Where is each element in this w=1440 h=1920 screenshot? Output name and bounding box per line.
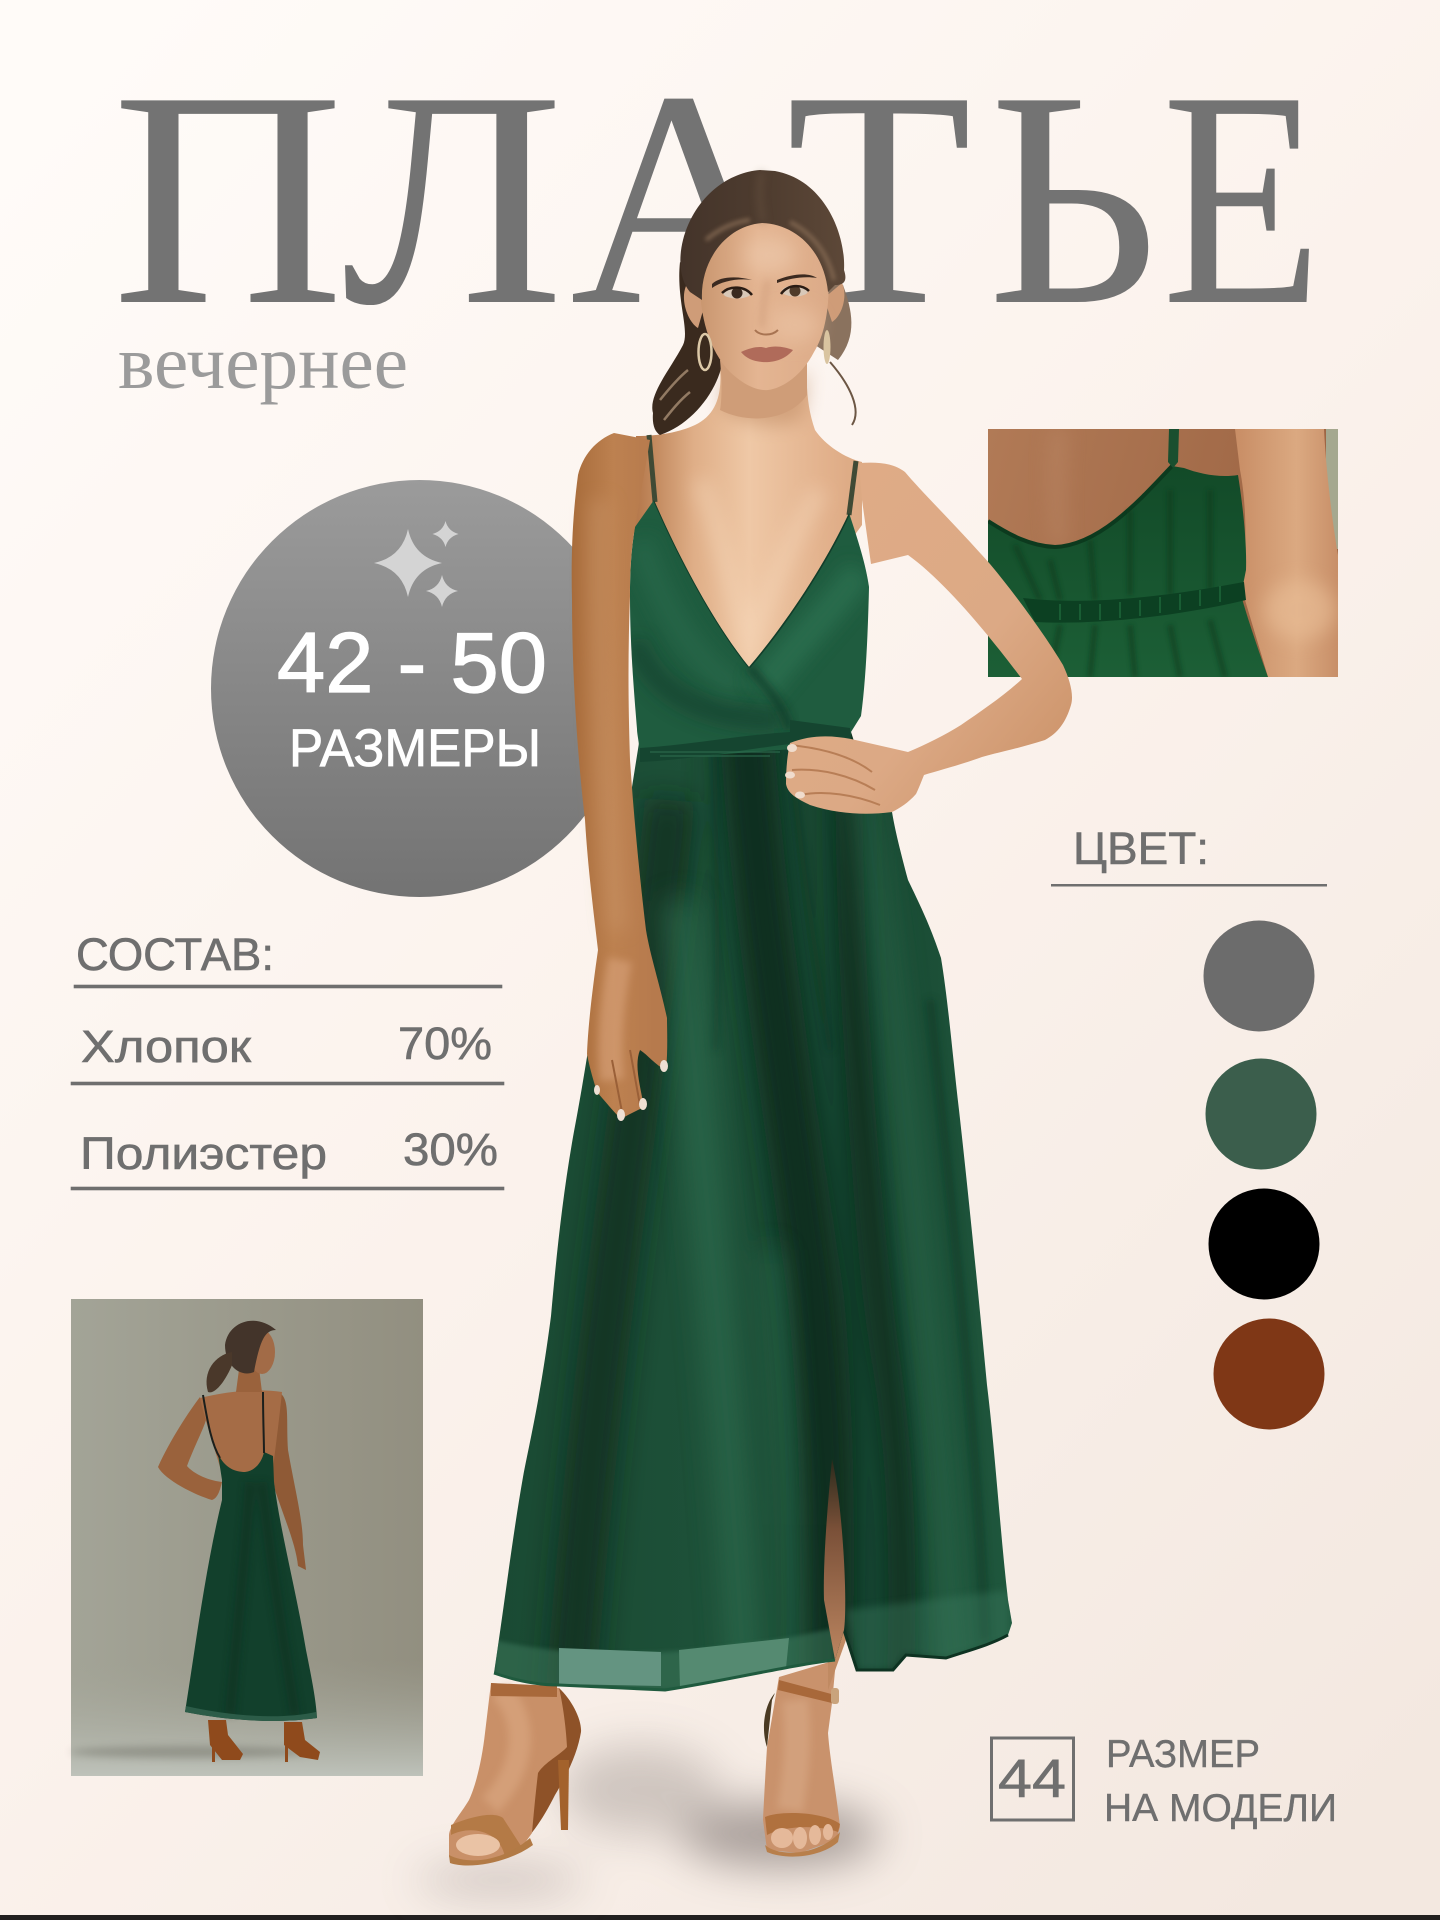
colour options: ЦВЕТ: xyxy=(1073,823,1209,874)
eyebrows xyxy=(712,274,817,288)
neck shadow xyxy=(720,355,807,418)
back view model xyxy=(158,1321,320,1762)
title: Ь xyxy=(988,28,1158,369)
skirt xyxy=(494,700,1012,1700)
icon: sparkles xyxy=(374,521,458,607)
model size: РАЗМЕР xyxy=(1106,1733,1260,1776)
title: А xyxy=(570,28,792,369)
composition table: Хлопок xyxy=(81,1021,251,1072)
right arm with hand on hip xyxy=(785,463,1072,814)
composition table xyxy=(71,929,504,1190)
model size: НА МОДЕЛИ xyxy=(1104,1787,1337,1830)
hair back and ponytail xyxy=(652,262,722,435)
subtitle: вечернее xyxy=(118,321,408,405)
eyes xyxy=(723,288,751,298)
model size xyxy=(992,1733,1337,1830)
bottom dark strip xyxy=(0,1915,1440,1920)
stray hair wisp xyxy=(830,362,856,425)
straps xyxy=(649,435,856,515)
composition table: Полиэстер xyxy=(80,1128,327,1179)
photo: back strap detail xyxy=(988,429,1338,677)
neck and chest xyxy=(630,365,862,680)
title: Т xyxy=(786,28,972,369)
waistband xyxy=(640,720,851,762)
model size: 44 xyxy=(998,1749,1066,1809)
composition table: 30% xyxy=(403,1124,498,1175)
title xyxy=(112,28,1322,369)
title: Л xyxy=(342,28,564,369)
hair xyxy=(680,170,845,300)
earrings xyxy=(698,334,712,370)
photo: back view of dress xyxy=(70,1299,423,1776)
composition table: 70% xyxy=(398,1018,492,1069)
title: П xyxy=(112,28,344,369)
size badge xyxy=(211,480,628,897)
slit xyxy=(824,1459,845,1660)
heading: composition: СОСТАВ: xyxy=(76,929,274,980)
colour options xyxy=(1051,823,1327,1430)
floor shadow xyxy=(415,1745,880,1894)
head xyxy=(680,170,845,418)
bodice xyxy=(630,500,869,762)
model in green dress xyxy=(449,170,1072,1866)
size badge: 42 - 50 xyxy=(277,616,547,711)
lips xyxy=(741,347,793,362)
left arm and hanging hand xyxy=(572,433,668,1121)
legs and shoes xyxy=(449,1560,846,1866)
nose xyxy=(755,330,778,334)
size badge: РАЗМЕРЫ xyxy=(289,719,541,778)
title: Е xyxy=(1162,28,1322,369)
